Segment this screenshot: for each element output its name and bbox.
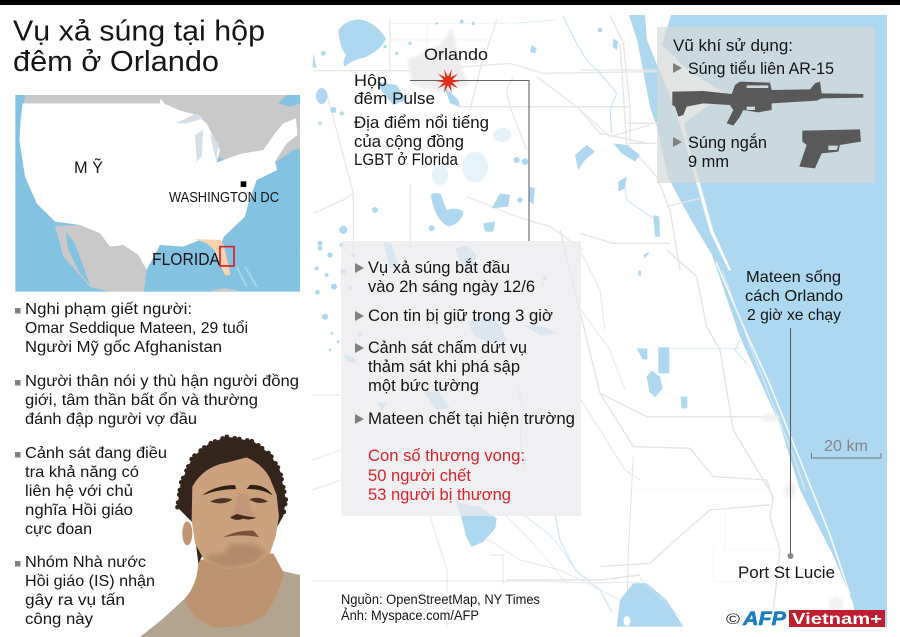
United States [19, 98, 297, 270]
Orlando and Pulse labels: đêm Pulse [354, 90, 435, 108]
lakes in the north [313, 17, 660, 258]
neck [185, 553, 284, 627]
bullet: start [355, 258, 535, 296]
fact: police investigation: Cảnh sát đang điều [25, 445, 167, 462]
fact: suspect: Nghi phạm giết người: [25, 301, 192, 318]
fact: IS claim: Hồi giáo (IS) nhận [25, 573, 155, 590]
bullet: death: Mateen chết tại hiện trường [368, 410, 575, 428]
fact: relatives: Người thân nói y thù hận người đồng [25, 373, 299, 390]
fact: suspect: Người Mỹ gốc Afghanistan [25, 339, 222, 356]
sources: Nguồn: OpenStreetMap, NY Times [341, 592, 540, 607]
casualty figures: Con số thương vong: [368, 447, 525, 465]
roads in the south [507, 230, 780, 627]
ocean and lagoon [629, 15, 887, 627]
Gulf of Mexico [144, 270, 148, 292]
hair [177, 437, 286, 563]
copyright: © [726, 611, 740, 628]
scale bar [812, 438, 881, 458]
bullet: police: thảm sát khi phá sập [368, 358, 520, 376]
Mateen residence note: Mateen sống [746, 269, 841, 286]
bullet: police: một bức tường [368, 377, 479, 395]
event panel [341, 241, 581, 516]
locator map of the United States [15, 95, 300, 292]
southern barrier island [716, 262, 850, 595]
connector line from Pulse to panel [410, 80, 529, 241]
portrait of Omar Mateen [140, 437, 300, 637]
eyebrows [202, 485, 273, 495]
Vietnam+ logo: Vietnam+ [792, 611, 882, 628]
roads in the north [313, 20, 657, 250]
Port St Lucie label: Port St Lucie [738, 564, 835, 582]
coastal road and shoreline detail [722, 270, 805, 490]
fact: police investigation: nghĩa Hồi giáo [25, 502, 133, 519]
inset labels [74, 158, 279, 269]
lakes in the south-east [500, 271, 747, 627]
title [13, 16, 265, 78]
ear [182, 521, 192, 545]
Orlando and Pulse labels: của cộng đồng [354, 133, 464, 151]
fact: suspect [15, 301, 248, 356]
event timeline text [355, 258, 575, 504]
fact: police investigation: tra khả năng có [25, 464, 139, 481]
main map of central Florida [312, 15, 887, 627]
Orlando and Pulse labels: Orlando [424, 46, 488, 64]
fact: police investigation: cực đoan [25, 521, 92, 538]
Great Lakes [175, 113, 218, 162]
icon: red starburst at Pulse [436, 69, 460, 93]
casualty figures [368, 447, 525, 504]
sources [341, 592, 540, 623]
sources: Ảnh: Myspace.com/AFP [341, 608, 479, 623]
fact: relatives: đánh đập người vợ đầu [25, 411, 197, 428]
bullet: start: Vụ xả súng bắt đầu [368, 258, 510, 277]
Orlando and Pulse labels: LGBT ở Florida [354, 151, 459, 169]
title: đêm ở Orlando [13, 46, 219, 78]
fact: IS claim [15, 554, 155, 628]
bullet: hostages: Con tin bị giữ trong 3 giờ [368, 307, 553, 325]
pistol label [673, 133, 767, 171]
fact: relatives [15, 373, 299, 428]
Cuba [210, 288, 240, 292]
Merritt Island and barrier strip [645, 15, 731, 271]
Mateen residence note: cách Orlando [745, 288, 843, 305]
bullet: start: vào 2h sáng ngày 12/6 [368, 278, 535, 296]
line to Port St Lucie [788, 328, 794, 559]
shirt [140, 570, 300, 637]
fact: IS claim: công này [25, 611, 93, 628]
weapons heading: Vũ khí sử dụng: [673, 37, 793, 55]
fact: suspect: Omar Seddique Mateen, 29 tuổi [25, 319, 248, 337]
Gulf of California [66, 232, 90, 285]
Orlando region marker [220, 247, 234, 266]
mouth [223, 531, 259, 537]
weapons panel [657, 27, 875, 183]
Mateen residence note [745, 269, 843, 324]
fact: police investigation: liên hệ với chủ [25, 483, 133, 500]
suspect facts [15, 301, 299, 628]
Orlando and Pulse labels: Địa điểm nổi tiếng [354, 114, 489, 132]
scale bar: 20 km [824, 438, 868, 455]
lakes west of and under the event panel [315, 242, 577, 572]
fact: IS claim: Nhóm Nhà nước [25, 554, 146, 571]
inset labels: FLORIDA [152, 249, 220, 269]
pistol label: 9 mm [688, 153, 729, 171]
Florida [195, 239, 231, 275]
further roads and rivers in the central south [312, 252, 640, 627]
Mexico [55, 225, 148, 292]
rifle label: Súng tiểu liên AR-15 [688, 60, 834, 78]
AFP logo: AFP [742, 609, 786, 630]
sea [15, 95, 300, 292]
roads in the north-east [580, 15, 700, 270]
top black bar [0, 0, 900, 5]
logos [726, 609, 885, 630]
Mateen residence note: 2 giờ xe chạy [747, 307, 841, 324]
fact: police investigation [15, 445, 167, 538]
pale lakes behind the Pulse note [432, 128, 511, 185]
Orlando urban area [408, 28, 470, 92]
fact: IS claim: gây ra vụ tấn [25, 592, 125, 609]
stubble [207, 544, 267, 568]
bullet: police [355, 339, 527, 395]
eyes [210, 498, 268, 503]
title: Vụ xả súng tại hộp [13, 16, 265, 48]
pistol label: Súng ngắn [688, 133, 767, 152]
inset labels: WASHINGTON DC [169, 190, 279, 206]
Washington marker [241, 181, 246, 187]
Canada [23, 95, 300, 165]
face [192, 457, 279, 570]
Orlando and Pulse labels [354, 46, 489, 169]
bullet: police: Cảnh sát chấm dứt vụ [368, 339, 527, 357]
towns along the south coast [761, 414, 843, 611]
casualty figures: 50 người chết [368, 467, 471, 485]
icon: AR-15 rifle [672, 82, 863, 126]
inset labels: M Ỹ [74, 158, 103, 177]
Bahamas [237, 267, 257, 287]
Orlando and Pulse labels: Hộp [354, 72, 387, 90]
nose [231, 493, 256, 520]
fact: relatives: giới, tâm thần bất ổn và thường [25, 391, 258, 409]
casualty figures: 53 người bị thương [368, 486, 511, 504]
icon: pistol [799, 129, 861, 168]
